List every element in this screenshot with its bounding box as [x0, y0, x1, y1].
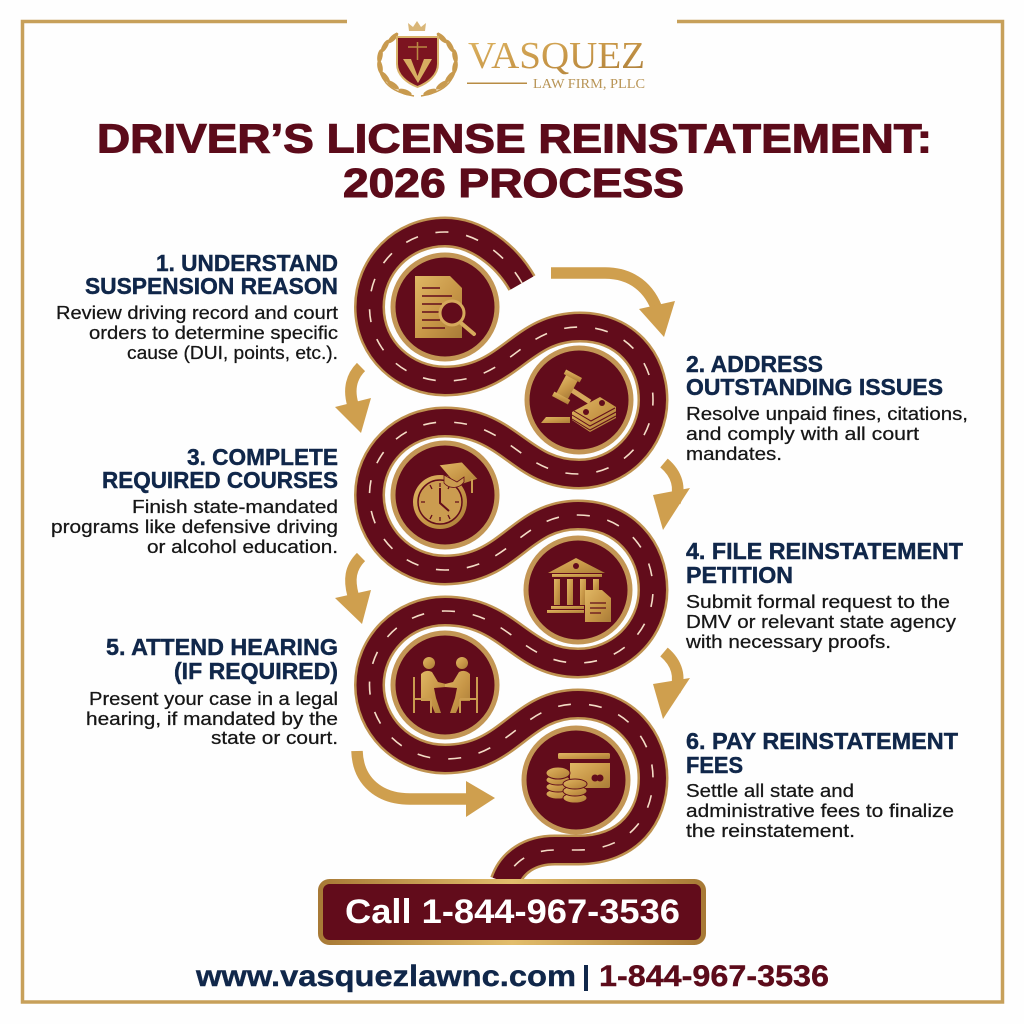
- step 6 text: [686, 728, 958, 841]
- logo rule: [467, 82, 527, 84]
- step 5 text: 5. ATTEND HEARING: [106, 634, 338, 660]
- step 3 text: [51, 444, 338, 557]
- arrows: [335, 273, 690, 817]
- footer contact line: 1-844-967-3536: [599, 960, 829, 993]
- step 2 text: mandates.: [686, 444, 782, 464]
- arrow: step 2 to 3: [335, 367, 371, 433]
- step 1 text: cause (DUI, points, etc.).: [127, 343, 338, 363]
- step 5 text: hearing, if mandated by the: [86, 709, 338, 729]
- step 3 text: 3. COMPLETE: [187, 444, 338, 470]
- arrow: step 5 to 6: [653, 652, 690, 719]
- arrow: step 1 to 2: [551, 273, 675, 337]
- step 5 text: state or court.: [211, 728, 338, 748]
- step 1 text: SUSPENSION REASON: [85, 273, 338, 299]
- step 4 text: PETITION: [686, 562, 793, 588]
- step 3 text: programs like defensive driving: [51, 517, 338, 537]
- arrow: step 3 to 4: [653, 463, 690, 530]
- step 6 text: administrative fees to finalize: [686, 801, 954, 821]
- icon: shield: [397, 37, 438, 87]
- step 2 text: OUTSTANDING ISSUES: [686, 374, 943, 400]
- call button: [320, 882, 704, 942]
- step 4 text: DMV or relevant state agency: [686, 612, 956, 632]
- step 3 text: REQUIRED COURSES: [102, 467, 338, 493]
- footer contact line: [195, 960, 829, 993]
- step 1 text: [56, 250, 338, 363]
- icon: laurel wreath: [376, 31, 459, 97]
- step 4 text: Submit formal request to the: [686, 592, 950, 612]
- step 5 text: [86, 634, 338, 748]
- step 6 text: FEES: [686, 752, 743, 778]
- step 6 text: 6. PAY REINSTATEMENT: [686, 728, 958, 754]
- step 1 text: 1. UNDERSTAND: [156, 250, 338, 276]
- step 6 text: Settle all state and: [686, 781, 854, 801]
- step 2 text: and comply with all court: [686, 424, 919, 444]
- icon badge 4: courthouse and document: [526, 538, 630, 642]
- arrow: step 4 to 5: [335, 557, 371, 624]
- step 2 text: 2. ADDRESS: [686, 351, 823, 377]
- step 2 text: Resolve unpaid fines, citations,: [686, 404, 968, 424]
- icon badge 2: gavel and money: [527, 348, 631, 452]
- footer contact line: www.vasquezlawnc.com: [195, 960, 576, 993]
- logo wordmark: VASQUEZ: [468, 35, 645, 77]
- logo: [376, 21, 645, 97]
- step 2 text: [686, 351, 968, 464]
- step 6 text: the reinstatement.: [686, 821, 855, 841]
- title: [97, 116, 932, 206]
- step 3 text: or alcohol education.: [147, 537, 338, 557]
- icon badge 3: clock and graduation cap: [393, 443, 497, 547]
- title: DRIVER’S LICENSE REINSTATEMENT:: [97, 116, 932, 162]
- call button: Call 1-844-967-3536: [345, 893, 680, 931]
- step 4 text: [685, 538, 963, 652]
- icon badge 6: credit card and coins: [524, 728, 628, 832]
- step 4 text: 4. FILE REINSTATEMENT: [686, 538, 963, 564]
- step 5 text: Present your case in a legal: [89, 689, 338, 709]
- step 1 text: Review driving record and court: [56, 303, 338, 323]
- title: 2026 PROCESS: [343, 160, 684, 206]
- arrow: step 5 to bottom: [357, 751, 495, 817]
- logo tagline: LAW FIRM, PLLC: [533, 77, 645, 92]
- step 4 text: with necessary proofs.: [685, 632, 891, 652]
- step 5 text: (IF REQUIRED): [174, 658, 338, 684]
- step 1 text: orders to determine specific: [89, 323, 338, 343]
- step 3 text: Finish state-mandated: [132, 497, 338, 517]
- winding road: [370, 232, 653, 882]
- icon: crown: [408, 21, 426, 31]
- icon badge 5: two people meeting: [393, 633, 497, 737]
- icon badge 1: document and magnifier: [393, 255, 497, 359]
